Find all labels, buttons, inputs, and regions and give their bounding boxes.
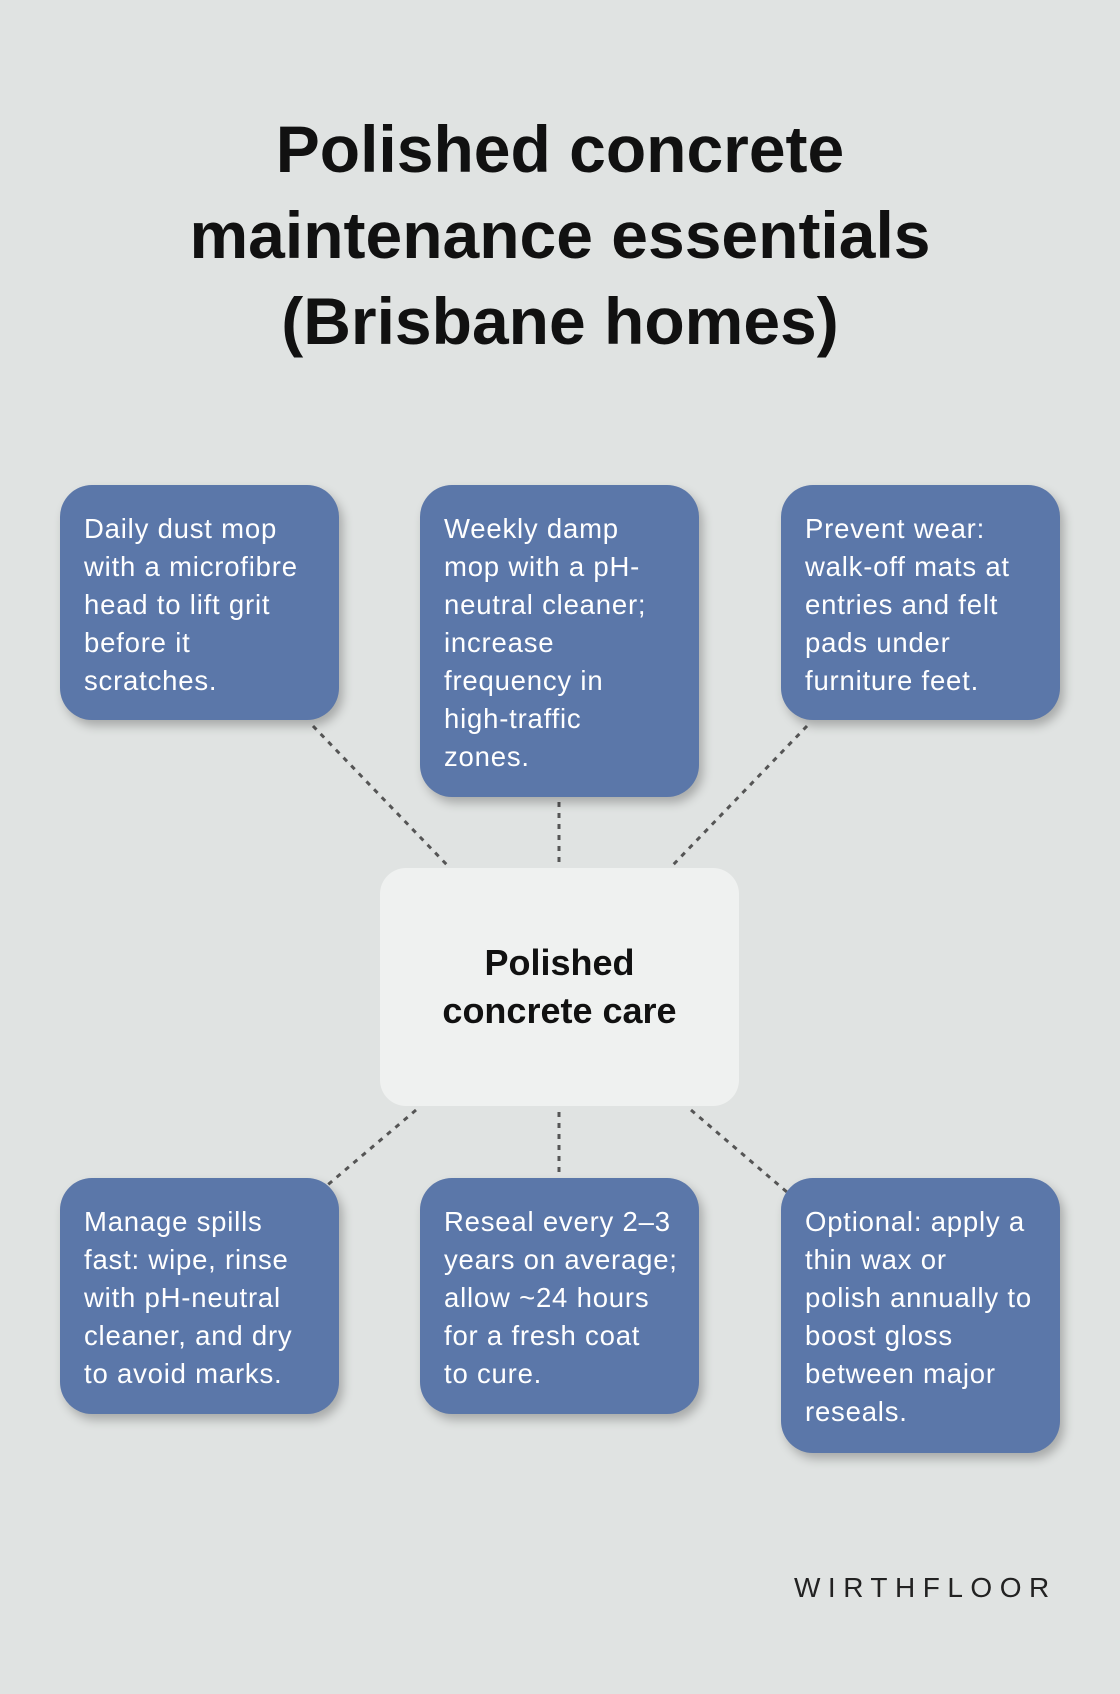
box: manage spills: to avoid marks. bbox=[84, 1358, 282, 1389]
box: weekly damp mop: neutral cleaner; bbox=[444, 589, 646, 620]
center box: concrete care bbox=[442, 990, 677, 1031]
title bbox=[189, 112, 931, 358]
box: reseal: to cure. bbox=[444, 1358, 542, 1389]
box: manage spills: with pH-neutral bbox=[84, 1282, 281, 1313]
box: prevent wear: entries and felt bbox=[805, 589, 998, 620]
box: optional wax: Optional: apply a bbox=[805, 1206, 1025, 1237]
box: optional wax: boost gloss bbox=[805, 1320, 953, 1351]
box: optional wax: thin wax or bbox=[805, 1244, 947, 1275]
box: manage spills bbox=[60, 1178, 339, 1414]
box: daily dust mop: head to lift grit bbox=[84, 589, 270, 620]
center box bbox=[380, 868, 739, 1106]
box: weekly damp mop: frequency in bbox=[444, 665, 603, 696]
box: weekly damp mop: high-traffic bbox=[444, 703, 582, 734]
box: weekly damp mop bbox=[420, 485, 699, 797]
box: daily dust mop: scratches. bbox=[84, 665, 217, 696]
box: daily dust mop: Daily dust mop bbox=[84, 513, 277, 544]
box: reseal: allow ~24 hours bbox=[444, 1282, 649, 1313]
box: prevent wear: furniture feet. bbox=[805, 665, 979, 696]
box: daily dust mop bbox=[60, 485, 339, 720]
title: (Brisbane homes) bbox=[281, 284, 839, 358]
box: prevent wear: walk-off mats at bbox=[805, 551, 1010, 582]
box: reseal bbox=[420, 1178, 699, 1414]
box: prevent wear: Prevent wear: bbox=[805, 513, 985, 544]
box: manage spills: cleaner, and dry bbox=[84, 1320, 292, 1351]
box: reseal: for a fresh coat bbox=[444, 1320, 640, 1351]
box: manage spills: Manage spills bbox=[84, 1206, 263, 1237]
box: optional wax: between major bbox=[805, 1358, 996, 1389]
box: reseal: Reseal every 2–3 bbox=[444, 1206, 671, 1237]
box: weekly damp mop: Weekly damp bbox=[444, 513, 619, 544]
box: daily dust mop: before it bbox=[84, 627, 191, 658]
box: reseal: years on average; bbox=[444, 1244, 678, 1275]
box: prevent wear: pads under bbox=[805, 627, 951, 658]
box: weekly damp mop: increase bbox=[444, 627, 554, 658]
brand logo: WIRTHFLOOR bbox=[794, 1572, 1057, 1603]
box: prevent wear bbox=[781, 485, 1060, 720]
box: weekly damp mop: mop with a pH- bbox=[444, 551, 640, 582]
title: maintenance essentials bbox=[189, 198, 931, 272]
box: weekly damp mop: zones. bbox=[444, 741, 530, 772]
center box: Polished bbox=[484, 942, 634, 983]
box: daily dust mop: with a microfibre bbox=[84, 551, 298, 582]
box: optional wax: reseals. bbox=[805, 1396, 908, 1427]
title: Polished concrete bbox=[276, 112, 844, 186]
box: manage spills: fast: wipe, rinse bbox=[84, 1244, 289, 1275]
box: optional wax bbox=[781, 1178, 1060, 1453]
box: optional wax: polish annually to bbox=[805, 1282, 1032, 1313]
